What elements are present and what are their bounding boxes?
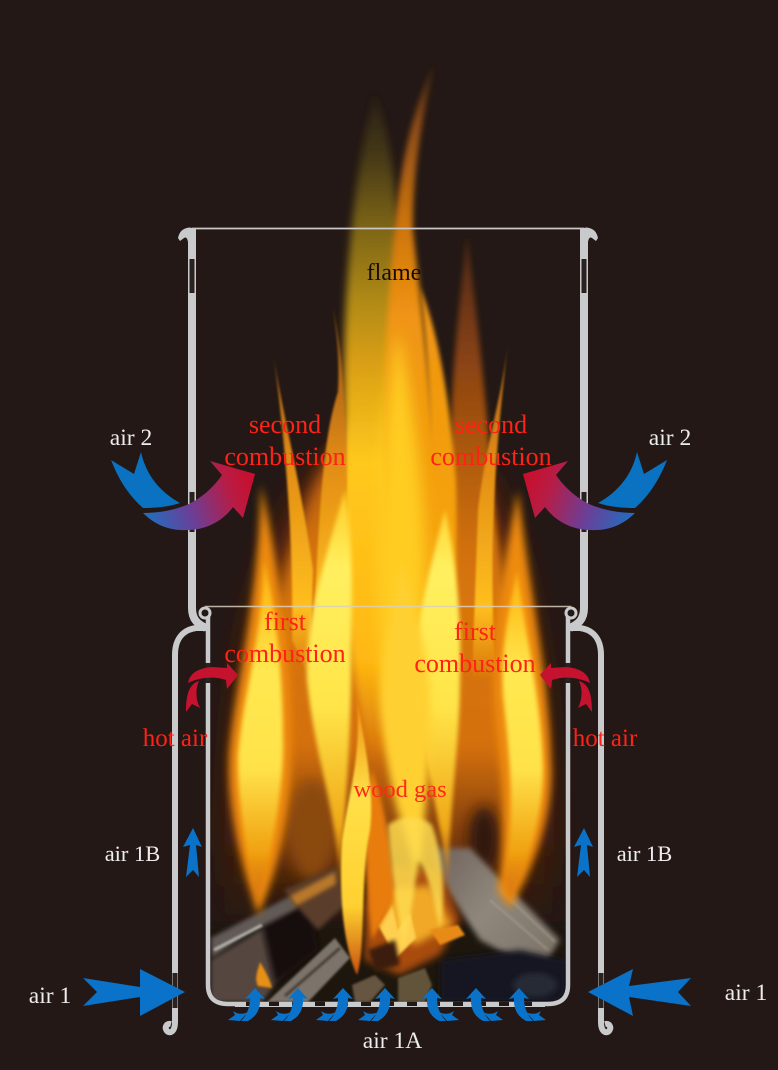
label: second combustion right: second <box>455 410 527 439</box>
flames back layer <box>224 421 554 930</box>
top hook left <box>178 228 196 242</box>
top hook right <box>580 228 598 242</box>
pot curl right <box>566 608 576 618</box>
top rim line <box>192 228 584 230</box>
label: air 1B left: air 1B <box>105 841 160 866</box>
brown pocket <box>288 780 336 880</box>
flame halo <box>224 436 554 930</box>
olive flame <box>341 95 422 760</box>
right birch log <box>433 848 560 972</box>
fire flecks <box>378 905 416 958</box>
wood pile <box>210 848 566 1005</box>
arrow: air 2 left <box>111 452 255 530</box>
tall orange flame <box>385 64 442 700</box>
left floor log <box>210 928 278 1002</box>
small flame <box>256 962 272 988</box>
dark pocket <box>469 806 499 870</box>
outer lower wall right <box>570 628 610 1032</box>
label: second combustion left: second <box>249 410 321 439</box>
ember bed <box>212 924 564 936</box>
upper wall left <box>192 236 206 628</box>
burning back log <box>284 866 345 930</box>
pot curl left <box>200 608 210 618</box>
inner pot rim line <box>205 606 571 608</box>
stump <box>398 968 432 1002</box>
mid orange flame <box>420 287 457 700</box>
label: air 1 right: air 1 <box>725 980 767 1006</box>
lower centre flame <box>388 818 443 950</box>
label: wood gas: wood gas <box>353 776 447 803</box>
left centre pale flame <box>307 490 352 885</box>
arrow: air 1B right <box>574 828 593 877</box>
wall vents <box>175 259 601 1008</box>
left thin flame <box>273 350 313 680</box>
outer lower wall left <box>166 628 206 1032</box>
left big flame glow <box>229 485 291 915</box>
lower orange flame <box>365 770 394 940</box>
right centre pale flame <box>415 510 460 885</box>
label: air 1 left: air 1 <box>29 983 71 1009</box>
right big flame glow <box>494 490 551 908</box>
arrow: hot air right <box>540 663 592 712</box>
label: air 1B right: air 1B <box>617 841 672 866</box>
stove body left <box>166 228 610 1032</box>
centre bright flame <box>381 560 430 880</box>
label: first combustion left: first <box>264 607 307 636</box>
right thin flame <box>472 340 508 680</box>
label: hot air right: hot air <box>573 725 638 752</box>
flame body <box>252 421 526 900</box>
floor perforations <box>246 1002 540 1006</box>
arrow: hot air left <box>186 663 238 712</box>
right big flame core <box>503 570 543 898</box>
label: second combustion left: combustion <box>224 442 346 471</box>
label: second combustion right: combustion <box>430 442 552 471</box>
arrow: air 1 right <box>588 969 691 1016</box>
label: hot air left: hot air <box>143 725 208 752</box>
left upper log <box>211 895 298 958</box>
floor underline <box>235 1006 545 1008</box>
arrow: air 2 right <box>523 452 667 530</box>
left dark gap <box>262 900 318 985</box>
label: flame: flame <box>367 260 421 286</box>
left big flame core <box>238 560 283 905</box>
arrows: air 1A floor inlets <box>228 988 546 1021</box>
label: first combustion right: combustion <box>414 649 536 678</box>
right rust flame <box>448 235 502 680</box>
label: air 1A: air 1A <box>363 1028 422 1054</box>
upper wall right <box>570 236 584 628</box>
right coals <box>440 950 566 1002</box>
flames front layer <box>229 64 551 975</box>
inner pot <box>208 612 568 1004</box>
label: first combustion right: first <box>454 617 497 646</box>
centre yellow column <box>378 330 425 830</box>
lower left flame <box>341 700 371 975</box>
arrow: air 1 left <box>83 969 185 1016</box>
arrow: air 1B left <box>183 828 202 877</box>
label: air 2 left: air 2 <box>110 425 152 451</box>
glowing centre <box>365 865 460 975</box>
label: air 2 right: air 2 <box>649 425 691 451</box>
second thin flame <box>312 308 347 680</box>
birch log <box>267 938 350 1002</box>
label: first combustion left: combustion <box>224 639 346 668</box>
